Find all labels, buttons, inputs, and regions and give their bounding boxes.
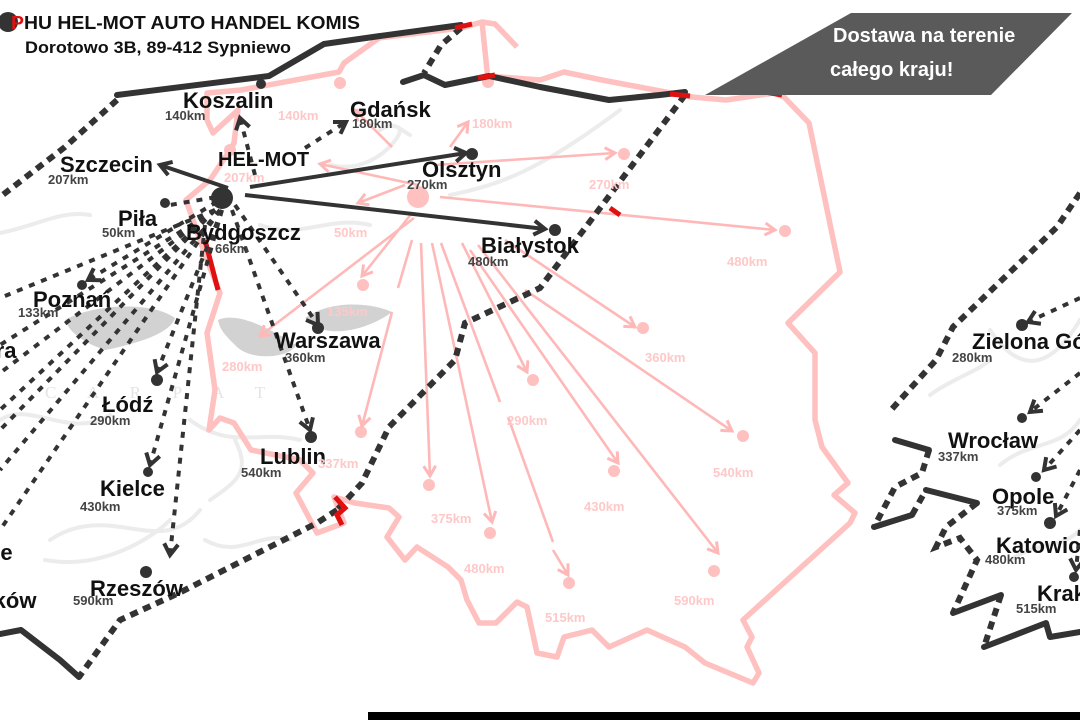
dark city labels and distances: Białystok — [481, 233, 580, 258]
pink distance labels: 290km — [507, 413, 547, 428]
dark city labels and distances: Opole — [992, 484, 1054, 509]
dark city labels and distances: 180km — [352, 116, 392, 131]
dark city labels and distances: 375km — [997, 503, 1037, 518]
pink distance labels: 590km — [674, 593, 714, 608]
title: company name and address: Dorotowo 3B, 89-412 Sypniewo — [25, 39, 291, 57]
dark city labels and distances: 50km — [102, 225, 135, 240]
pink distance labels: 180km — [472, 116, 512, 131]
red overlap accents — [205, 24, 782, 525]
pink distance labels: 480km — [727, 254, 767, 269]
dark city labels and distances: 430km — [80, 499, 120, 514]
dark city labels and distances: Bydgoszcz — [186, 220, 301, 245]
pale rivers and terrain — [0, 110, 1080, 562]
title: company name and address — [0, 12, 360, 57]
dark city labels and distances: 140km — [165, 108, 205, 123]
pink distance labels: 430km — [584, 499, 624, 514]
dark city labels and distances: 480km — [985, 552, 1025, 567]
dark city labels and distances: Gdańsk — [350, 97, 431, 122]
dark route arrows from HEL-MOT — [0, 118, 1080, 570]
dark city labels and distances: 270km — [407, 177, 447, 192]
dark city labels and distances: Koszalin — [183, 88, 273, 113]
dark city labels and distances: Olsztyn — [422, 157, 501, 182]
grey panel: delivery note: całego kraju! — [830, 59, 953, 81]
pink distance labels: 360km — [645, 350, 685, 365]
dark city labels and distances: 337km — [938, 449, 978, 464]
dark city labels and distances: HEL-MOT — [218, 149, 309, 171]
pink distance labels: 540km — [713, 465, 753, 480]
dark city labels and distances: 480km — [468, 254, 508, 269]
dark city labels and distances: Kielce — [100, 476, 165, 501]
pink distance labels: 375km — [431, 511, 471, 526]
dark city labels and distances: Łódź — [102, 392, 153, 417]
pink distance labels: 135km — [327, 304, 367, 319]
pink distance labels: 207km — [224, 170, 264, 185]
grey relief shapes — [65, 304, 392, 356]
pink distance labels: 50km — [334, 225, 367, 240]
pink distance labels: 515km — [545, 610, 585, 625]
dark city labels and distances: Piła — [118, 206, 158, 231]
dark city labels and distances: Lublin — [260, 444, 326, 469]
pink distance labels — [222, 108, 767, 625]
dark city labels and distances: Szczecin — [60, 152, 153, 177]
grey panel: delivery note — [705, 13, 1072, 95]
pink distance labels: 337km — [318, 456, 358, 471]
dark city labels and distances: 360km — [285, 350, 325, 365]
dark city labels and distances — [0, 88, 1080, 616]
dark city labels and distances: 590km — [73, 593, 113, 608]
title: company name and address: PHU HEL-MOT AUTO HANDEL KOMIS — [11, 13, 360, 33]
grey panel: delivery note: Dostawa na terenie — [833, 25, 1015, 47]
pink Poland outline — [186, 22, 855, 683]
pink route arrows — [260, 110, 775, 575]
dark city labels and distances: 515km — [1016, 601, 1056, 616]
dark city labels and distances: 207km — [48, 172, 88, 187]
pink distance labels: 280km — [222, 359, 262, 374]
dark city labels and distances: Warszawa — [275, 328, 381, 353]
black bar at bottom — [368, 712, 1080, 720]
dark city labels and distances: 66km — [215, 241, 248, 256]
dark city labels and distances: 290km — [90, 413, 130, 428]
pale rivers and terrain: C A R P A T — [45, 383, 266, 402]
dark city labels and distances: 540km — [241, 465, 281, 480]
dark city labels and distances: 280km — [952, 350, 992, 365]
pink destination dots — [224, 76, 791, 589]
pink distance labels: 270km — [589, 177, 629, 192]
pink distance labels: 480km — [464, 561, 504, 576]
dark city labels and distances: Poznań — [33, 287, 111, 312]
pink distance labels: 140km — [278, 108, 318, 123]
dark city dots — [77, 79, 1079, 582]
dark city labels and distances: Wrocław — [948, 428, 1039, 453]
dark city labels and distances: 133km — [18, 305, 58, 320]
dark city labels and distances: Rzeszów — [90, 576, 184, 601]
